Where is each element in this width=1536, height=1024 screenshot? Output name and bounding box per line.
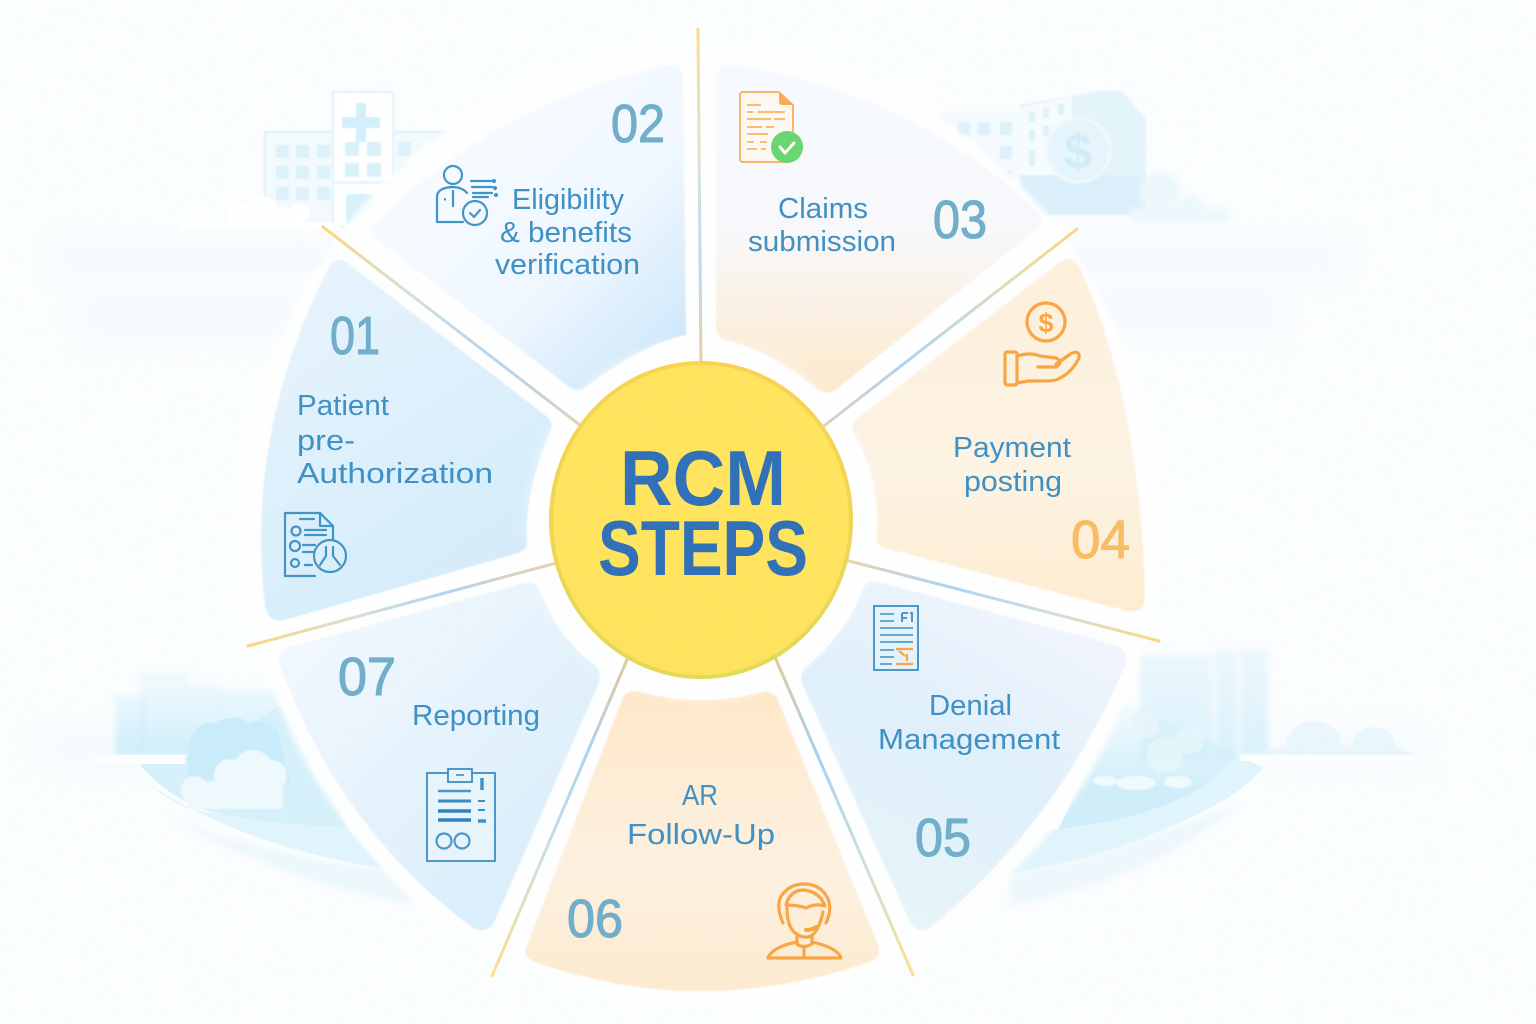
number 02: 02 xyxy=(611,94,665,154)
panel 04: Payment posting xyxy=(852,259,1145,611)
number 07: 07 xyxy=(338,647,396,707)
label 01: Authorization xyxy=(297,458,493,490)
icon: call center agent xyxy=(768,884,841,958)
label 05 xyxy=(878,690,1060,756)
label 01: Patient xyxy=(297,390,389,422)
hub circle xyxy=(551,363,851,677)
title xyxy=(598,434,808,592)
panel 01: Patient pre-Authorization xyxy=(261,260,552,621)
label 04 xyxy=(953,432,1071,498)
number 01: 01 xyxy=(330,306,380,366)
background: hospital building left xyxy=(265,92,455,227)
label 02 xyxy=(495,184,640,281)
label 06 xyxy=(627,780,775,851)
background: clouds left top xyxy=(180,196,340,230)
background: clouds right top xyxy=(1130,172,1230,223)
panel 06: AR Follow-Up xyxy=(526,691,879,991)
segment shape 02 xyxy=(371,65,686,390)
title: RCM xyxy=(620,434,786,522)
segment shape 01 xyxy=(261,260,552,621)
label 07: Reporting xyxy=(412,700,540,732)
number 03: 03 xyxy=(933,190,987,250)
label 05: Management xyxy=(878,724,1060,756)
label 04: Payment xyxy=(953,432,1071,464)
icon: clipboard report xyxy=(427,769,495,861)
icon: hand with coin: $ xyxy=(1038,308,1054,338)
label 05: Denial xyxy=(929,690,1012,722)
icon: denial document xyxy=(874,606,918,670)
background: city and clouds lower right xyxy=(1010,650,1420,905)
background: city and clouds lower left xyxy=(95,672,415,905)
hub glow xyxy=(529,341,873,699)
segment shape 06 xyxy=(526,691,879,991)
background: dollar building right: $ xyxy=(1064,124,1092,180)
panel 07: Reporting xyxy=(279,582,600,930)
label 02: verification xyxy=(495,249,640,281)
number 04: 04 xyxy=(1071,510,1130,570)
panel 02: Eligibility & benefits verification xyxy=(371,65,686,390)
label 03 xyxy=(748,193,896,258)
icon: hand with coin xyxy=(1005,303,1079,385)
panel 03: Claims submission xyxy=(716,65,1042,393)
segment shape 03 xyxy=(716,65,1042,393)
background scene: hospital and city xyxy=(40,91,1420,905)
segment shape 05 xyxy=(802,581,1126,930)
label 02: & benefits xyxy=(500,217,632,249)
label 01 xyxy=(297,390,493,490)
background: horizon bands xyxy=(40,250,1420,758)
label 03: Claims xyxy=(778,193,868,225)
label 04: posting xyxy=(964,466,1062,498)
number 06: 06 xyxy=(567,889,623,949)
icon: document with green check xyxy=(740,92,803,163)
background: dollar building right xyxy=(940,91,1146,215)
segment shape 07 xyxy=(279,582,600,930)
icon: person with check badge xyxy=(437,166,497,225)
label 02: Eligibility xyxy=(512,184,624,216)
label 06: Follow-Up xyxy=(627,819,775,851)
white halo behind wheel xyxy=(245,49,1157,1001)
central hub xyxy=(551,363,851,677)
label 06: AR xyxy=(682,780,718,812)
radial dividers xyxy=(248,29,1159,976)
icon: checklist with clock xyxy=(285,513,346,576)
number 05: 05 xyxy=(915,808,971,868)
title: STEPS xyxy=(598,504,808,592)
segment shape 04 xyxy=(852,259,1145,611)
panel 05: Denial Management xyxy=(802,581,1126,930)
label 03: submission xyxy=(748,226,896,258)
label 01: pre- xyxy=(297,425,355,457)
